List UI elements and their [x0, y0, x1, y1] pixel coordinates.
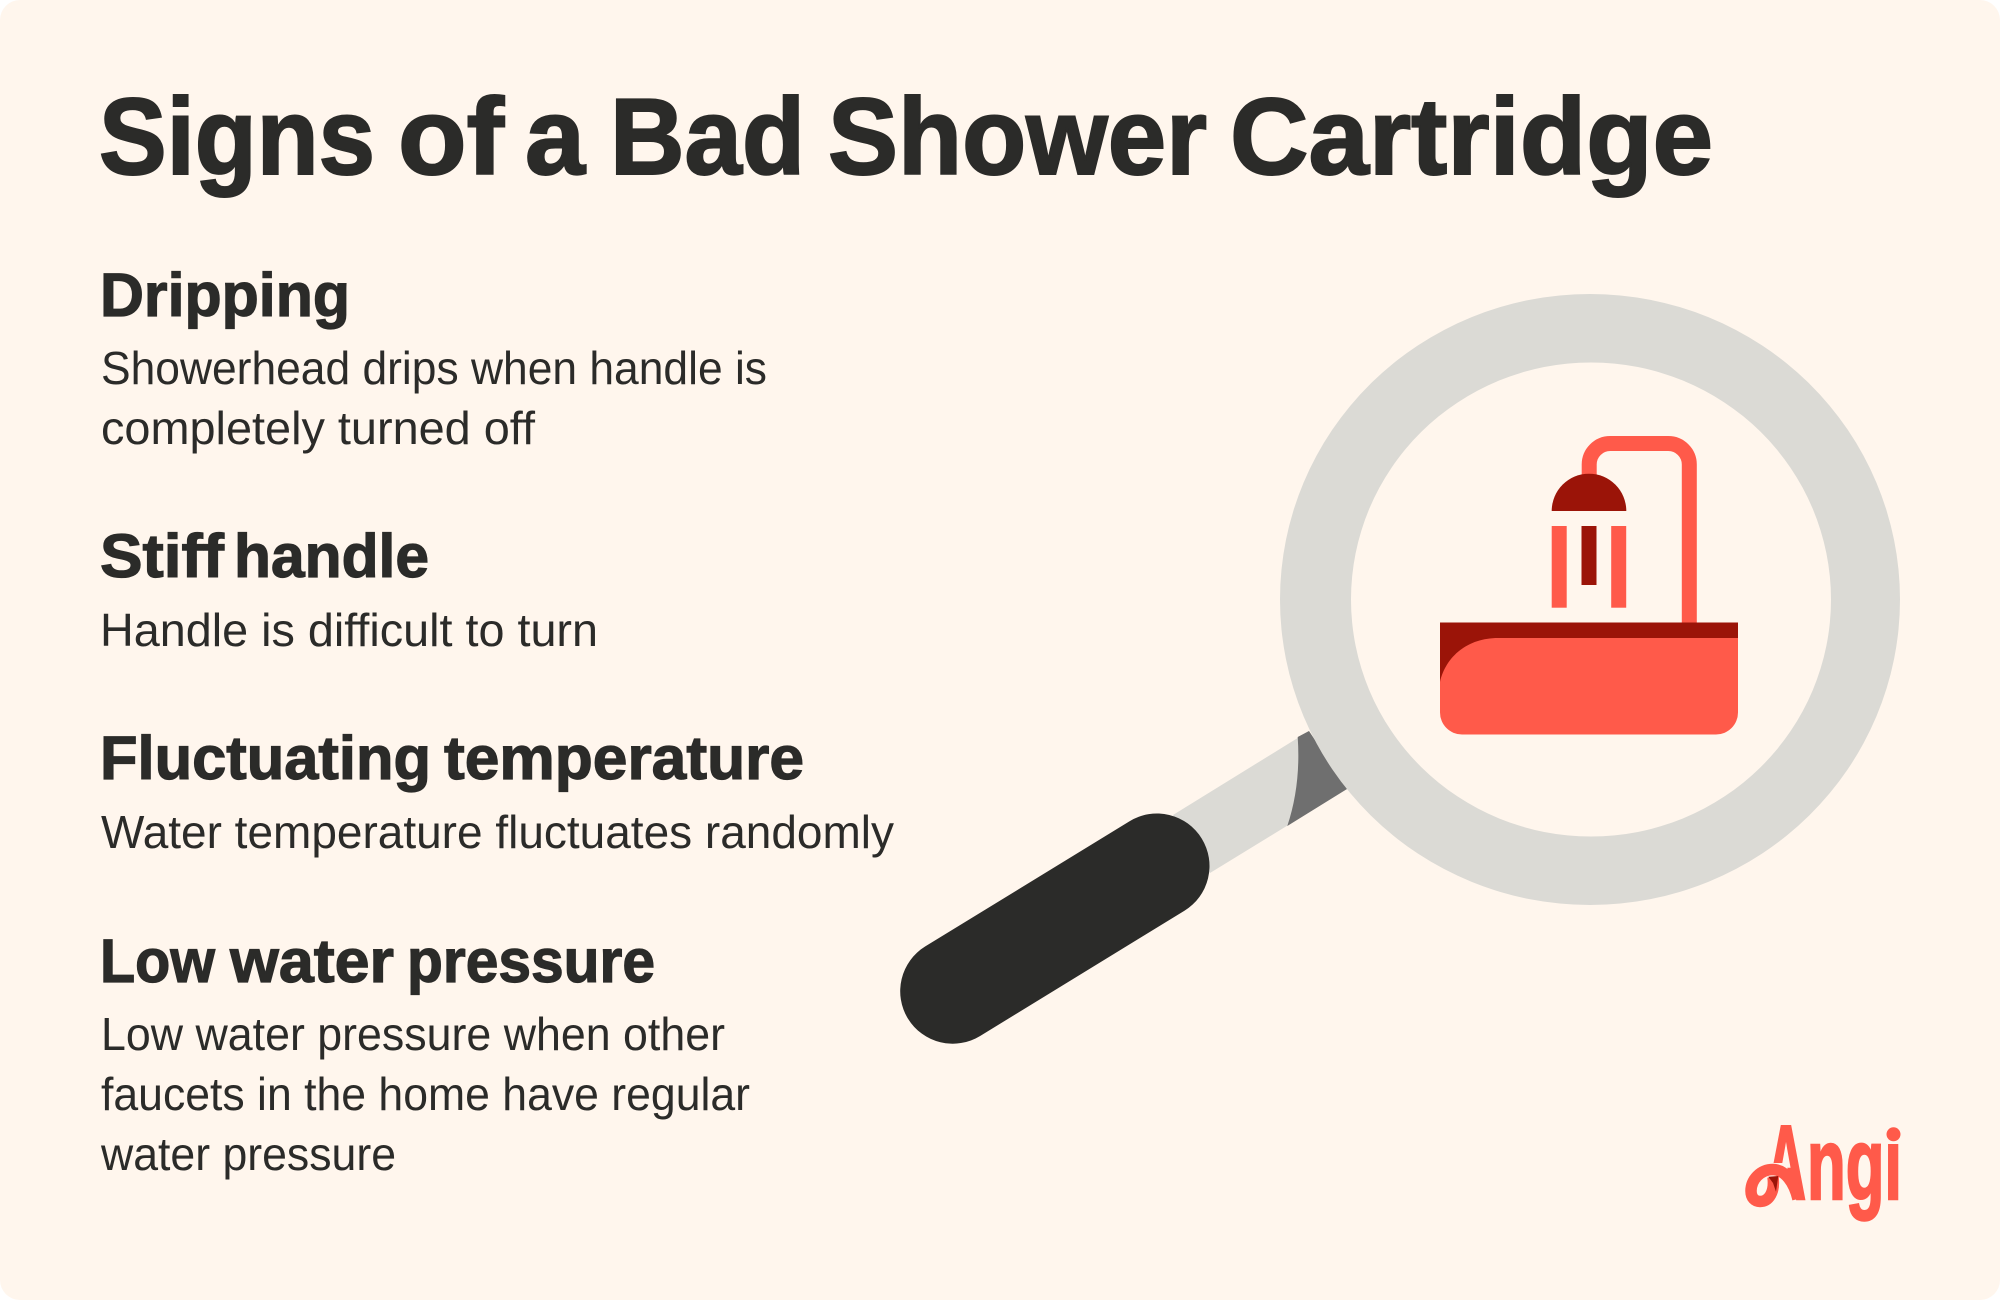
- title: Shower: [828, 76, 1207, 198]
- logo letters ngi: ngi: [1807, 1107, 1902, 1221]
- description: low water pressure: Low water pressure when other: [101, 1008, 725, 1060]
- heading: fluctuating temperature: temperature: [444, 724, 804, 792]
- title: Cartridge: [1230, 76, 1713, 198]
- heading: stiff handle: Stiff: [100, 522, 225, 590]
- description: fluctuating temperature: Water temperature fluctuates randomly: [101, 806, 894, 858]
- shower pipe: [1589, 444, 1689, 624]
- heading: stiff handle: handle: [234, 522, 429, 590]
- heading: dripping: Dripping: [100, 261, 350, 329]
- logo: Angi: [1745, 1125, 1900, 1222]
- magnifying glass handle grip: [953, 866, 1157, 991]
- heading: fluctuating temperature: [100, 724, 804, 792]
- panel: list of signs: [100, 261, 894, 1180]
- description: dripping: [101, 342, 767, 454]
- water streams: [1552, 526, 1626, 608]
- heading: low water pressure: water: [229, 927, 394, 995]
- bathtub: [1440, 622, 1738, 734]
- sign: dripping: [100, 261, 767, 454]
- title: of: [398, 76, 505, 198]
- heading: low water pressure: Low: [100, 927, 216, 995]
- logo i dot: [1882, 1118, 1904, 1144]
- icon: magnifying glass: [953, 294, 1900, 991]
- sign: fluctuating temperature: [100, 724, 894, 858]
- sign: low water pressure: [100, 927, 750, 1180]
- description: low water pressure: water pressure: [100, 1128, 396, 1180]
- logo loop shadow: [1768, 1176, 1778, 1192]
- title: Bad: [610, 76, 805, 198]
- description: low water pressure: faucets in the home have regular: [101, 1068, 750, 1120]
- title: [99, 76, 1713, 198]
- title: Signs: [99, 76, 375, 198]
- shaft shadow: [1287, 731, 1347, 826]
- shower head: [1552, 474, 1626, 511]
- heading: fluctuating temperature: Fluctuating: [100, 724, 431, 792]
- description: low water pressure: [100, 1008, 750, 1180]
- logo letter A: A: [1766, 1104, 1806, 1222]
- magnifying glass lens ring: [1280, 294, 1900, 905]
- sign: stiff handle: [100, 522, 598, 656]
- heading: stiff handle: [100, 522, 429, 590]
- description: stiff handle: Handle is difficult to turn: [100, 604, 598, 656]
- icon: shower and bathtub: [1440, 444, 1738, 734]
- description: dripping: completely turned off: [101, 402, 535, 454]
- heading: low water pressure: [100, 927, 655, 995]
- logo loop: [1751, 1170, 1798, 1202]
- description: dripping: Showerhead drips when handle is: [101, 342, 767, 394]
- title: a: [525, 76, 586, 198]
- magnifying glass shaft: [1173, 731, 1347, 873]
- heading: low water pressure: pressure: [407, 927, 655, 995]
